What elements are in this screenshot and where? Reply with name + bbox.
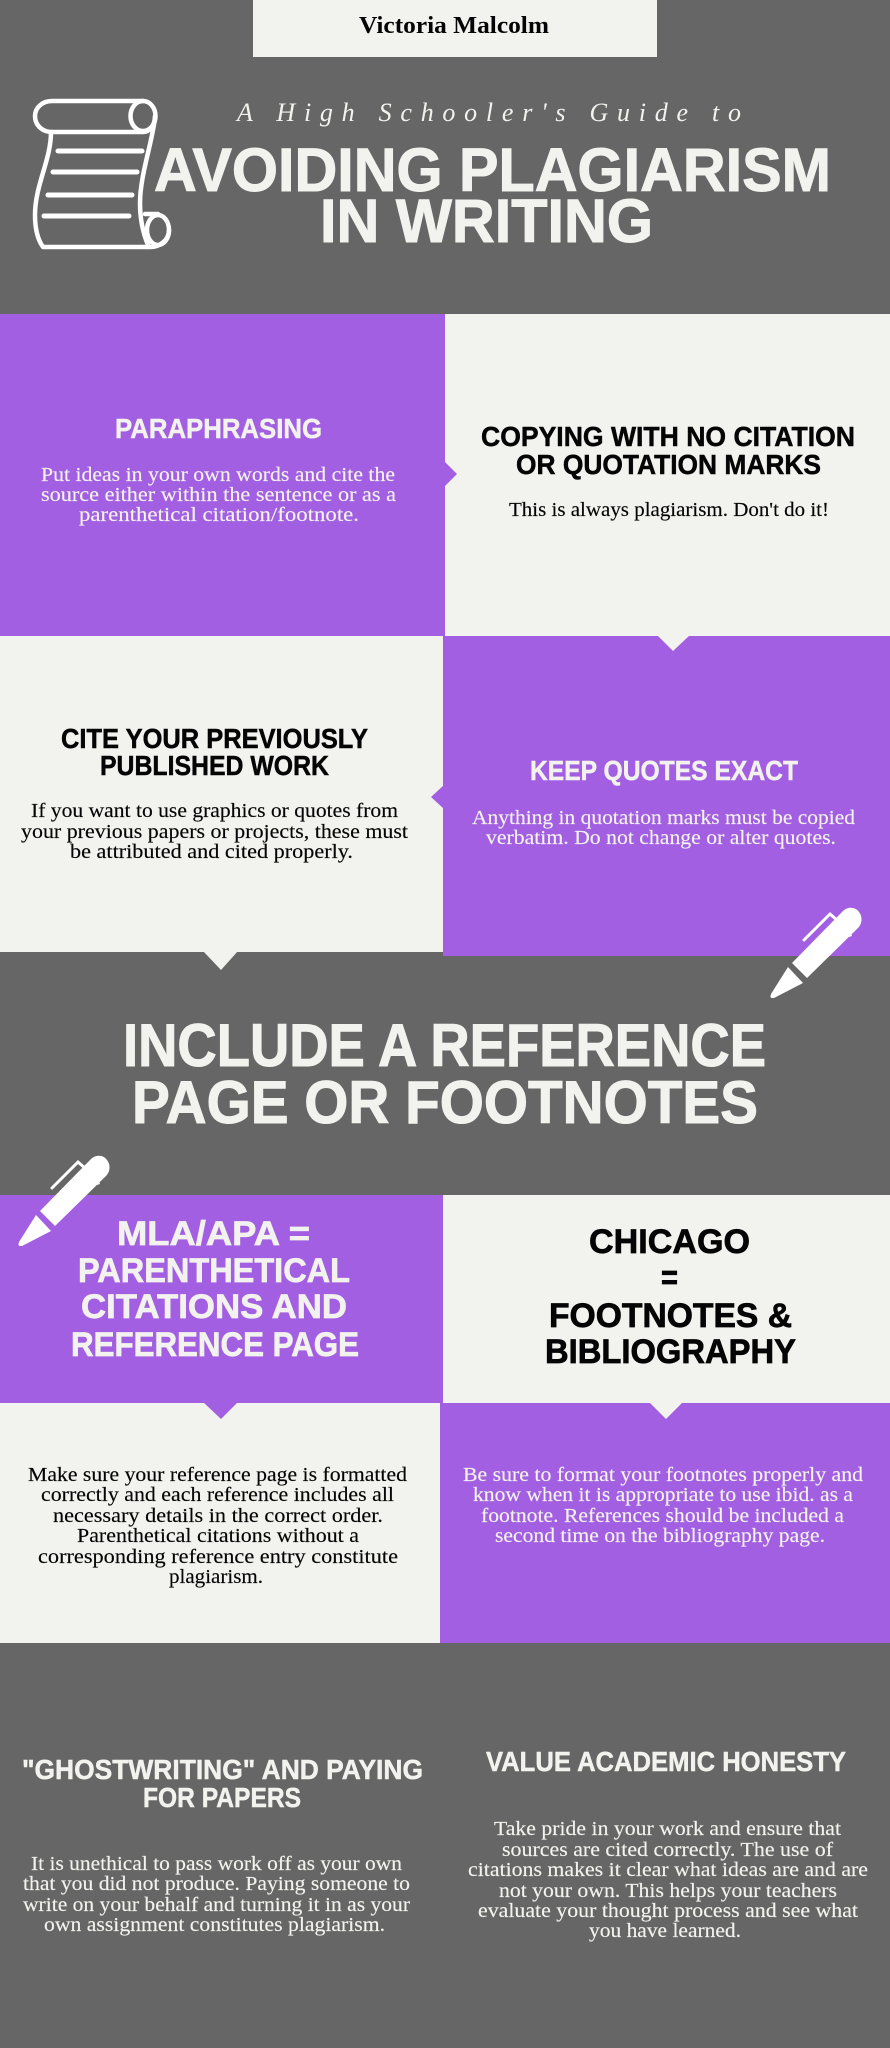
heading: cite previous work: CITE YOUR PREVIOUSLY: [61, 723, 368, 754]
body: footnote details: [463, 1464, 863, 1547]
body: reference page details: Make sure your reference page is formatted: [28, 1464, 407, 1486]
body: cite previous work: If you want to use graphics or quotes from: [31, 800, 398, 822]
body: ghostwriting: write on your behalf and turning it in as your: [23, 1894, 410, 1916]
body: cite previous work: be attributed and cited properly.: [70, 841, 353, 863]
panel: paraphrasing: [0, 314, 445, 636]
panel: ghostwriting: [22, 1754, 423, 1936]
arrow: copying to keep quotes: [657, 635, 690, 651]
heading: copying: COPYING WITH NO CITATION: [481, 421, 855, 452]
body: keep quotes exact: verbatim. Do not change or alter quotes.: [486, 827, 836, 849]
heading: paraphrasing: PARAPHRASING: [115, 413, 322, 444]
subtitle: A High Schooler's Guide to: [235, 98, 741, 127]
body: reference page details: plagiarism.: [169, 1566, 263, 1588]
body: keep quotes exact: Anything in quotation marks must be copied: [472, 807, 855, 829]
panel: keep quotes exact: [443, 636, 890, 956]
panel: Chicago: [443, 1195, 890, 1403]
section heading: include a reference page: PAGE OR FOOTNOTES: [132, 1069, 758, 1136]
section heading: include a reference page: INCLUDE A REFERENCE: [123, 1012, 766, 1079]
main title: [154, 136, 831, 255]
heading: keep quotes exact: KEEP QUOTES EXACT: [530, 755, 798, 786]
body: footnote details: footnote. References should be included a: [481, 1505, 844, 1527]
body: paraphrasing: [41, 464, 396, 526]
body: paraphrasing: parenthetical citation/footnote.: [79, 504, 359, 526]
heading: MLA/APA: PARENTHETICAL: [78, 1252, 350, 1290]
body: reference page details: Parenthetical citations without a: [77, 1525, 359, 1547]
arrow: paraphrasing to copying: [445, 462, 457, 486]
body: academic honesty: not your own. This helps your teachers: [499, 1880, 837, 1902]
body: reference page details: correctly and each reference includes all: [41, 1484, 394, 1506]
body: academic honesty: [468, 1818, 868, 1942]
body: ghostwriting: own assignment constitutes plagiarism.: [44, 1914, 385, 1936]
body: cite previous work: [21, 800, 408, 863]
body: academic honesty: sources are cited correctly. The use of: [502, 1839, 833, 1861]
arrow: keep quotes to cite: [431, 785, 444, 809]
heading: cite previous work: [61, 723, 368, 781]
title: [154, 98, 831, 255]
panel: cite previous work: [0, 636, 443, 952]
main title: IN WRITING: [320, 187, 653, 255]
body: academic honesty: evaluate your thought process and see what: [478, 1900, 858, 1922]
body: ghostwriting: that you did not produce. Paying someone to: [23, 1873, 410, 1895]
panel: MLA/APA: [0, 1195, 443, 1403]
arrow: MLA/APA to details: [203, 1402, 238, 1419]
body: academic honesty: Take pride in your work and ensure that: [494, 1818, 841, 1840]
main title: AVOIDING PLAGIARISM: [154, 136, 831, 204]
body: copying: This is always plagiarism. Don't do it!: [509, 499, 829, 521]
heading: ghostwriting: "GHOSTWRITING" AND PAYING: [22, 1754, 423, 1785]
body: ghostwriting: It is unethical to pass work off as your own: [31, 1853, 402, 1875]
panel: copying: [445, 314, 890, 636]
panel: footnote details: [440, 1403, 890, 1643]
body: footnote details: second time on the bibliography page.: [495, 1525, 825, 1547]
body: reference page details: necessary details in the correct order.: [53, 1505, 383, 1527]
heading: Chicago: [545, 1223, 796, 1371]
heading: Chicago: =: [661, 1259, 678, 1297]
arrow: cite to reference section: [203, 951, 238, 970]
body: keep quotes exact: [472, 807, 855, 849]
panel: academic honesty: [468, 1746, 868, 1942]
heading: Chicago: FOOTNOTES &: [549, 1297, 792, 1335]
body: paraphrasing: Put ideas in your own words and cite the: [41, 464, 395, 486]
icon: pen left: [19, 1156, 110, 1246]
body: academic honesty: citations makes it clear what ideas are and are: [468, 1859, 868, 1881]
body: academic honesty: you have learned.: [589, 1920, 741, 1942]
body: reference page details: corresponding reference entry constitute: [38, 1546, 398, 1568]
section heading: include a reference page: [123, 1012, 766, 1136]
body: footnote details: know when it is appropriate to use ibid. as a: [473, 1484, 853, 1506]
heading: ghostwriting: [22, 1754, 423, 1813]
heading: copying: OR QUOTATION MARKS: [516, 449, 821, 480]
author name box: [253, 0, 657, 57]
heading: Chicago: CHICAGO: [589, 1223, 750, 1261]
heading: ghostwriting: FOR PAPERS: [143, 1782, 301, 1813]
body: footnote details: Be sure to format your footnotes properly and: [463, 1464, 863, 1486]
body: reference page details: [28, 1464, 407, 1588]
body: ghostwriting: [23, 1853, 410, 1936]
heading: academic honesty: VALUE ACADEMIC HONESTY: [486, 1746, 846, 1777]
heading: MLA/APA: CITATIONS AND: [81, 1288, 347, 1326]
heading: MLA/APA: REFERENCE PAGE: [71, 1326, 359, 1364]
heading: Chicago: BIBLIOGRAPHY: [545, 1333, 796, 1371]
heading: cite previous work: PUBLISHED WORK: [100, 750, 329, 781]
heading: MLA/APA: [71, 1215, 359, 1364]
icon: scroll: [35, 101, 169, 247]
arrow: Chicago to details: [649, 1402, 683, 1419]
icon: pen top right: [771, 908, 862, 998]
heading: MLA/APA: MLA/APA =: [117, 1215, 310, 1253]
author name box: Victoria Malcolm: [359, 13, 549, 39]
body: paraphrasing: source either within the sentence or as a: [41, 484, 396, 506]
panel: reference page details: [0, 1403, 440, 1643]
body: cite previous work: your previous papers or projects, these must: [21, 821, 408, 843]
heading: copying: [481, 421, 855, 480]
